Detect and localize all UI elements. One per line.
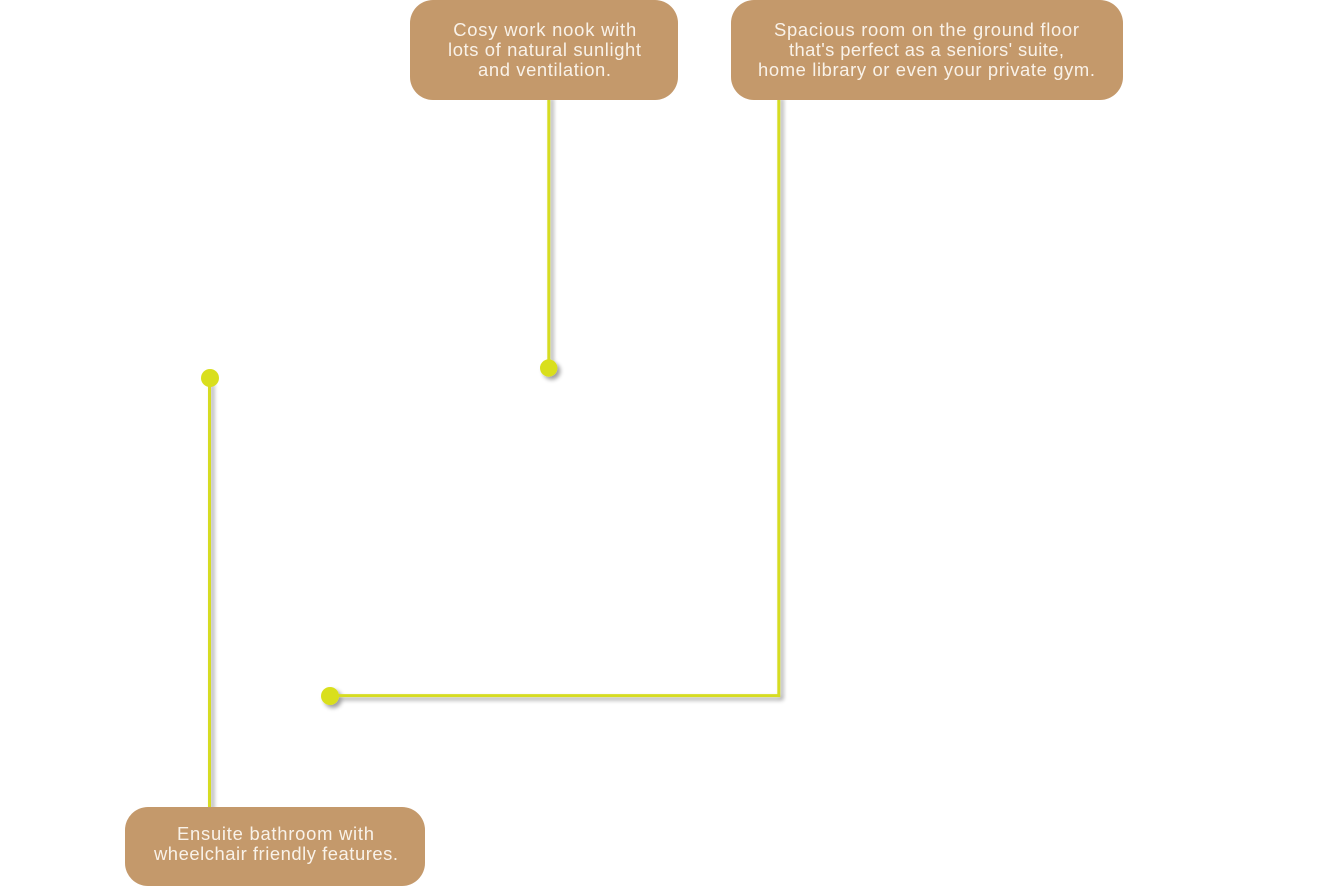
- callout: work nook: [410, 0, 678, 100]
- callout: ensuite bathroom: [125, 807, 425, 886]
- callout: spacious room: [731, 0, 1123, 100]
- connector: work nook: [540, 95, 557, 377]
- connector: spacious room: [321, 95, 779, 705]
- callout: ensuite bathroom: wheelchair friendly features.: [153, 843, 398, 864]
- callout: spacious room: that's perfect as a seniors' suite,: [789, 39, 1064, 60]
- callout: ensuite bathroom: Ensuite bathroom with: [177, 823, 374, 844]
- callout: spacious room: Spacious room on the ground floor: [774, 19, 1079, 40]
- connector: ensuite bathroom: [201, 369, 219, 812]
- callout: work nook: lots of natural sunlight: [448, 39, 641, 60]
- callout: spacious room: home library or even your private gym.: [758, 59, 1095, 80]
- callout: work nook: Cosy work nook with: [453, 19, 636, 40]
- callout: work nook: and ventilation.: [478, 59, 611, 80]
